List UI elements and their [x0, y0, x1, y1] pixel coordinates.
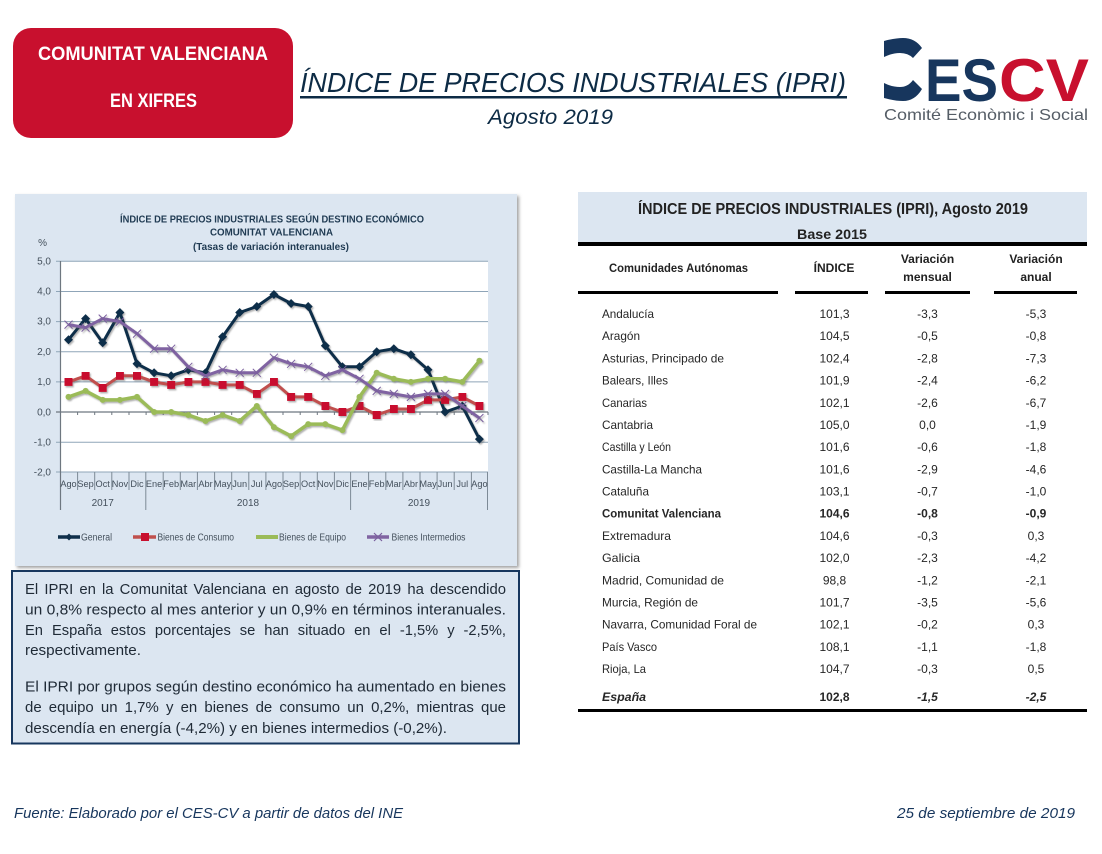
table total row: España: España [602, 690, 646, 704]
text box: IPRI commentary: El IPRI por grupos según destino económico ha aumentado en bienes [25, 678, 506, 696]
table rows: Comunitat Valenciana [602, 507, 721, 521]
table rows: Cantabria [602, 418, 653, 432]
table: IPRI by autonomous community [578, 192, 1087, 712]
table rows: Extremadura [602, 529, 671, 543]
panel: line chart of IPRI by economic destination [15, 194, 517, 566]
table column headers: ÍNDICE [814, 260, 854, 275]
logo: CES-CV: ES [925, 47, 998, 114]
text box: IPRI commentary: un 0,8% respecto al mes anterior y un 0,9% en términos interanuales. [25, 602, 506, 618]
table rows: 0,0 [919, 418, 936, 432]
x axis month labels: Ago [266, 479, 282, 489]
table rows: 104,6 [819, 507, 850, 521]
logo: CES-CV [884, 38, 1089, 124]
chart legend: Bienes de Equipo [279, 532, 346, 544]
x axis year labels [92, 498, 431, 509]
table rows: -6,7 [1026, 396, 1047, 410]
table rows: -4,2 [1026, 551, 1047, 565]
table rows: Galicia [602, 551, 640, 565]
table rows: Murcia, Región de [602, 596, 698, 610]
table rows: -5,3 [1026, 307, 1047, 321]
y axis labels: % [38, 238, 47, 249]
x axis year labels: 2018 [237, 498, 260, 509]
table rows: Madrid, Comunidad de [602, 573, 724, 587]
table total row: España: -1,5 [917, 690, 938, 704]
table rows: -1,2 [917, 573, 938, 587]
text box: IPRI commentary: respectivamente. [25, 642, 141, 659]
table rows: 104,6 [819, 529, 850, 543]
table rows: -2,6 [917, 396, 938, 410]
table rows: País Vasco [602, 640, 657, 654]
x axis month labels: Abr [404, 479, 418, 489]
footer: source: Fuente: Elaborado por el CES-CV a partir de datos del INE [14, 805, 404, 822]
text box: IPRI commentary: de equipo un 1,7% y en bienes de consumo un 0,2%, mientras que [25, 699, 506, 716]
y axis labels: 2,0 [37, 347, 51, 358]
table rows: 0,3 [1028, 529, 1045, 543]
table column headers: Variación [901, 252, 954, 266]
series: General [68, 294, 479, 439]
x axis month labels: Ene [146, 479, 162, 489]
x axis year labels: 2019 [408, 498, 431, 509]
y axis labels [34, 238, 51, 478]
table rows: 105,0 [819, 418, 850, 432]
table column headers [578, 252, 1077, 292]
table rows: 101,6 [819, 440, 850, 454]
table rows: -1,0 [1026, 484, 1047, 498]
x axis month labels: Nov [112, 479, 128, 489]
table rows: Cataluña [602, 484, 649, 498]
x axis month labels: Nov [317, 479, 334, 489]
x axis month labels: Oct [96, 479, 110, 489]
table rows: -2,9 [917, 462, 938, 476]
text box: IPRI commentary [12, 571, 519, 744]
table title band: Base 2015 [797, 226, 867, 242]
table rows: -0,2 [917, 618, 938, 632]
table rows: Aragón [602, 329, 640, 343]
table total row: España: 102,8 [819, 690, 850, 704]
chart title [120, 212, 424, 253]
table rows: 104,5 [819, 329, 850, 343]
table rows: 101,6 [819, 462, 850, 476]
table rows: 102,1 [819, 618, 850, 632]
table rows: Balears, Illes [602, 374, 668, 388]
x axis month labels [60, 479, 488, 489]
table rows: -0,8 [1026, 329, 1047, 343]
table rows: 0,5 [1028, 662, 1045, 676]
x axis month labels: Jun [232, 479, 247, 489]
chart legend: Bienes de Consumo [158, 532, 234, 544]
table rows: 103,1 [819, 484, 850, 498]
table rows: 101,7 [819, 596, 850, 610]
table rows: Andalucía [602, 307, 654, 321]
table rows: 102,4 [819, 351, 850, 365]
chart title: ÍNDICE DE PRECIOS INDUSTRIALES SEGÚN DESTINO ECONÓMICO [120, 212, 424, 226]
chart title: (Tasas de variación interanuales) [193, 242, 349, 253]
x axis month labels: Jun [438, 479, 453, 489]
series: Bienes de Equipo [68, 361, 479, 436]
chart legend [58, 532, 466, 544]
x axis month labels: Abr [198, 479, 213, 489]
table rows: -0,3 [917, 529, 938, 543]
x axis month labels: May [214, 479, 232, 489]
x axis month labels: Ago [471, 479, 488, 489]
subtitle: date: Agosto 2019 [486, 106, 613, 129]
table rows: -4,6 [1026, 462, 1047, 476]
table rows: -0,8 [917, 507, 938, 521]
table rows: Castilla y León [602, 440, 671, 454]
table rows: -1,8 [1026, 640, 1047, 654]
x axis month labels: Dic [336, 479, 349, 489]
table total row: España: -2,5 [1026, 690, 1047, 704]
table rows: -1,1 [917, 640, 938, 654]
table rows: -7,3 [1026, 351, 1047, 365]
x axis month labels: Sep [77, 479, 94, 489]
table rows: -0,6 [917, 440, 938, 454]
x axis month labels: Oct [301, 479, 316, 489]
table column headers: Variación [1009, 252, 1063, 266]
table total row: España [578, 690, 1087, 712]
logo: CES-CV: CV [999, 47, 1089, 114]
table rows [602, 307, 1047, 676]
table column headers: mensual [903, 270, 952, 284]
table rows: -2,1 [1026, 573, 1047, 587]
table column headers: Comunidades Autónomas [609, 261, 748, 275]
x axis month labels: Ago [60, 479, 77, 489]
table rows: Navarra, Comunidad Foral de [602, 618, 757, 632]
table rows: -1,8 [1026, 440, 1047, 454]
table rows: -0,5 [917, 329, 938, 343]
table rows: -3,3 [917, 307, 938, 321]
x axis month labels: Mar [180, 479, 196, 489]
table rows: 108,1 [819, 640, 850, 654]
y axis labels: 4,0 [37, 286, 51, 298]
chart title: COMUNITAT VALENCIANA [210, 228, 333, 238]
x axis month labels: Ene [351, 479, 368, 489]
main title: ÍNDICE DE PRECIOS INDUSTRIALES (IPRI) [300, 67, 846, 98]
table rows: -1,9 [1026, 418, 1047, 432]
series: Bienes Intermedios [68, 319, 479, 418]
table column headers: anual [1020, 270, 1052, 284]
table rows: 102,0 [819, 551, 850, 565]
red badge: Comunitat Valenciana en xifres [13, 28, 293, 138]
table rows: 102,1 [819, 396, 850, 410]
x axis month labels: Feb [369, 479, 385, 489]
table title band: ÍNDICE DE PRECIOS INDUSTRIALES (IPRI), Agosto 2019 [638, 199, 1028, 218]
y axis labels: 0,0 [37, 408, 51, 418]
table rows: -0,7 [917, 484, 938, 498]
table rows: 101,3 [819, 307, 850, 321]
red badge: Comunitat Valenciana en xifres: EN XIFRES [110, 91, 197, 112]
table rows: -5,6 [1026, 596, 1047, 610]
table rows: Canarias [602, 396, 647, 410]
table rows: Rioja, La [602, 662, 646, 676]
y axis labels: -2,0 [34, 468, 51, 478]
x axis month labels: Feb [163, 479, 179, 489]
x axis month labels: Dic [130, 479, 144, 489]
y axis labels: 1,0 [37, 377, 51, 388]
logo: CES-CV: Comité Econòmic i Social [884, 107, 1088, 124]
table rows: Asturias, Principado de [602, 351, 724, 365]
table rows: -6,2 [1026, 374, 1047, 388]
text box: IPRI commentary: descendía en energía (-4,2%) y en bienes intermedios (-0,2%). [25, 720, 447, 737]
text box: IPRI commentary: En España estos porcentajes se han situado en el -1,5% y -2,5%, [25, 622, 506, 639]
red badge: Comunitat Valenciana en xifres: COMUNITAT VALENCIANA [38, 44, 268, 65]
text box: IPRI commentary: El IPRI en la Comunitat Valenciana en agosto de 2019 ha descendido [25, 581, 506, 598]
footer: date: 25 de septiembre de 2019 [896, 805, 1076, 822]
x axis month labels: Sep [283, 479, 299, 489]
table rows: Castilla-La Mancha [602, 462, 702, 476]
series: Bienes de Consumo [68, 376, 479, 415]
table rows: 101,9 [819, 374, 850, 388]
y axis labels: 3,0 [37, 316, 51, 328]
table rows: 98,8 [823, 573, 847, 587]
chart legend: Bienes Intermedios [392, 532, 466, 544]
table rows: 0,3 [1028, 618, 1045, 632]
table rows: -2,4 [917, 374, 938, 388]
x axis month labels: Jul [456, 479, 468, 489]
chart legend: General [81, 532, 112, 544]
table title band [578, 192, 1087, 246]
table rows: -2,3 [917, 551, 938, 565]
table rows: -2,8 [917, 351, 938, 365]
table rows: -0,3 [917, 662, 938, 676]
table rows: -0,9 [1026, 507, 1047, 521]
x axis month labels: Jul [251, 479, 263, 489]
y axis labels: 5,0 [37, 256, 51, 268]
y axis labels: -1,0 [34, 438, 51, 448]
x axis month labels: Mar [386, 479, 402, 489]
plot area [60, 261, 488, 472]
table rows: 104,7 [819, 662, 850, 676]
x axis year labels: 2017 [92, 498, 114, 509]
table rows: -3,5 [917, 596, 938, 610]
x axis month labels: May [419, 479, 437, 489]
